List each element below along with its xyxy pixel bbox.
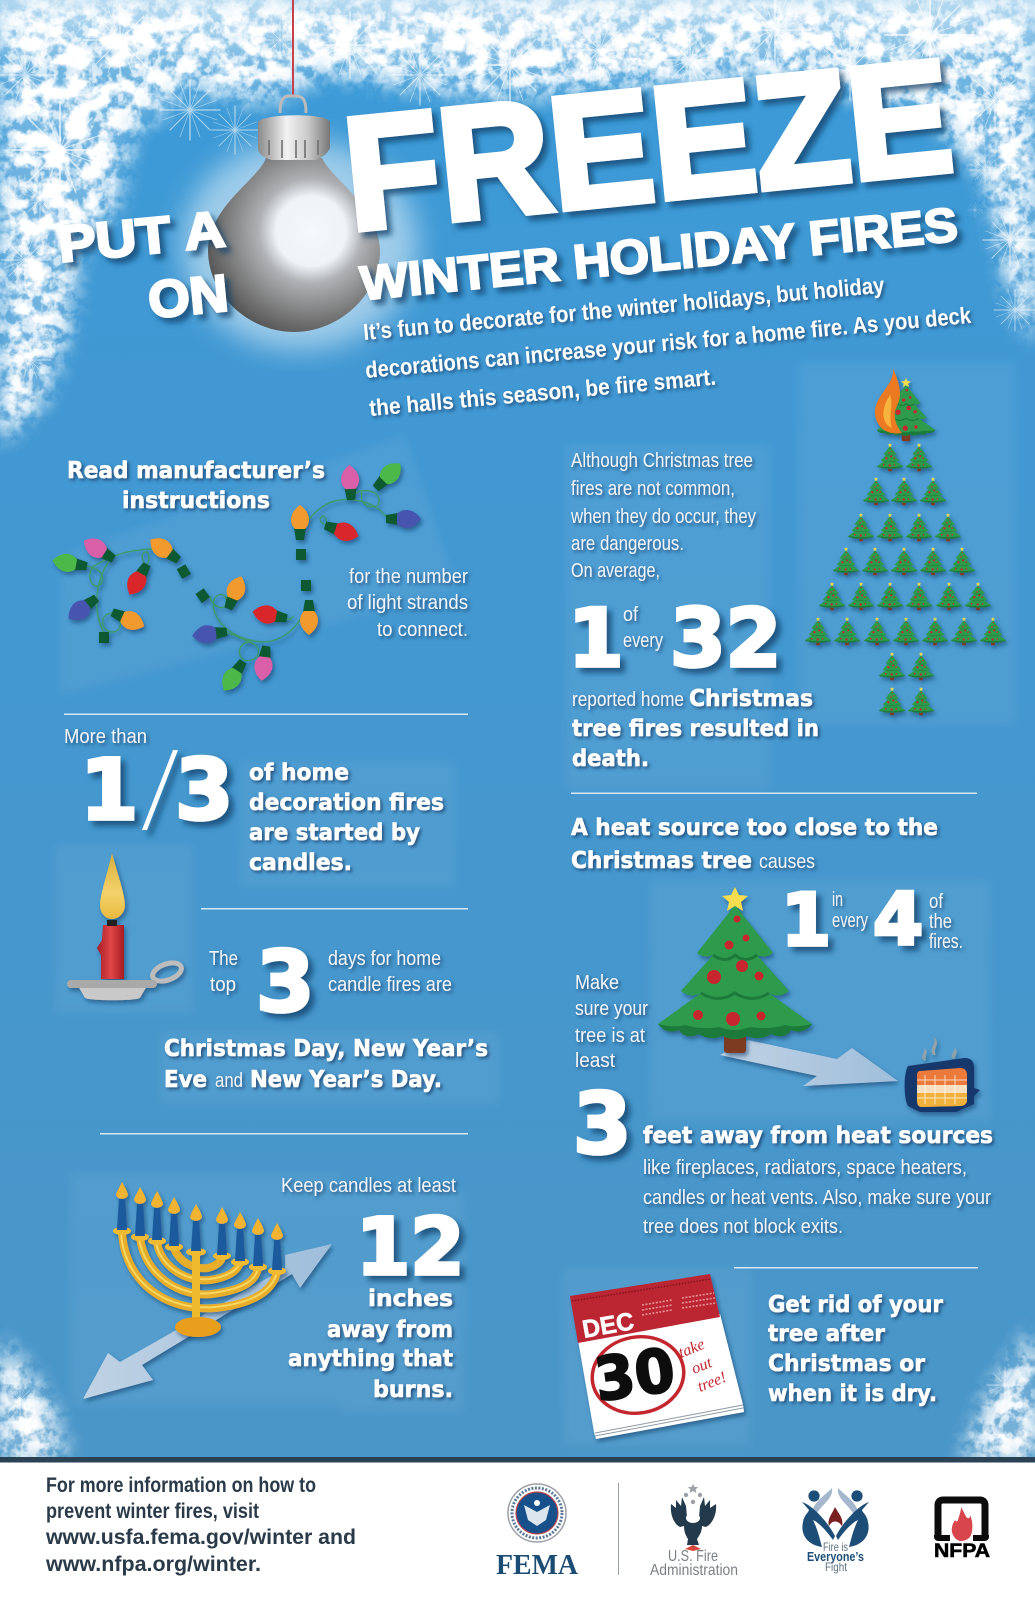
heading: read instructions: Read manufacturer’s	[67, 458, 325, 484]
text: although: On average,	[571, 560, 660, 582]
handwritten note: take	[676, 1336, 707, 1362]
panel: discard tree	[570, 1274, 944, 1439]
text: resulted in death: tree fires resulted in	[572, 716, 819, 742]
text: the top: The	[209, 948, 238, 970]
title: WINTER HOLIDAY FIRES: WINTER HOLIDAY FIRES	[358, 199, 960, 311]
icon: light strands	[51, 457, 421, 696]
text: make sure: tree is at	[575, 1025, 645, 1047]
text: decoration fires: of home	[249, 760, 349, 786]
calendar month: DEC	[580, 1307, 636, 1344]
text: the top: top	[210, 974, 236, 996]
title: FREEZE: FREEZE	[337, 25, 959, 264]
title: PUT A: PUT A	[56, 200, 227, 273]
text: more information: For more information on how to	[46, 1474, 316, 1497]
icon: menorah	[113, 1182, 286, 1337]
panel: tree fires	[568, 368, 1006, 772]
stat: 1/3: 1	[80, 741, 138, 839]
stat: 1 in every 4: of	[929, 891, 943, 913]
text: resulted in death: reported home	[572, 689, 684, 711]
text: although: when they do occur, they	[570, 506, 756, 528]
text: although: are dangerous.	[571, 533, 684, 555]
slogan: Fire is	[823, 1540, 848, 1554]
panel: heat source	[571, 815, 993, 1238]
heading: read instructions: instructions	[122, 488, 270, 514]
panel: top three days	[164, 933, 488, 1093]
text: feet away: candles or heat vents. Also, make sure your	[643, 1187, 991, 1209]
stat: 12 inches: 12	[356, 1203, 465, 1293]
text: light strands: for the number	[349, 566, 468, 588]
title: ON: ON	[146, 265, 231, 330]
text: decoration fires: candles.	[249, 850, 352, 876]
text: away from anything: anything that	[288, 1346, 453, 1372]
stat: 1 in every 4: fires.	[929, 931, 963, 953]
logo: Fire is Everyone's Fight: Fight	[825, 1560, 848, 1574]
lighter content panels	[55, 362, 1016, 1446]
text: days for home candle fires	[328, 948, 452, 996]
text: get rid of tree: tree after	[768, 1321, 886, 1347]
stat: 1 of every 32	[568, 592, 781, 685]
icon: large christmas tree	[658, 887, 812, 1053]
text: although	[570, 450, 756, 582]
text: more information: www.usfa.fema.gov/winter and	[45, 1526, 356, 1549]
text: keep candles: Keep candles at least	[281, 1175, 456, 1197]
text: get rid of tree	[768, 1292, 944, 1407]
text: feet away	[643, 1123, 993, 1238]
text: light strands: to connect.	[377, 619, 468, 641]
text: more information: www.nfpa.org/winter.	[45, 1553, 261, 1576]
heading: heat source	[571, 815, 938, 874]
calendar date: 30	[590, 1335, 679, 1416]
icon: space heater	[905, 1036, 980, 1112]
stat: 1 in every 4: the	[929, 911, 952, 933]
text: away from anything: inches	[368, 1286, 453, 1312]
stat: 1/3	[80, 741, 233, 839]
text: more than: More than	[64, 726, 147, 748]
text: holiday dates	[164, 1036, 488, 1093]
stat: 1 in every 4: in	[832, 889, 843, 911]
ornament	[182, 0, 418, 350]
text: more information: prevent winter fires, visit	[46, 1500, 259, 1523]
text: make sure: least	[575, 1050, 615, 1072]
logo: Fire is Everyone's Fight	[802, 1488, 869, 1574]
arrow: tree to heater	[720, 1040, 898, 1086]
text: resulted in death	[572, 686, 819, 772]
text: make sure: sure your	[575, 998, 648, 1020]
icon: burning tree	[875, 368, 935, 441]
stat: 3 days: 3	[256, 933, 314, 1031]
FEMA wordmark: FEMA	[496, 1549, 578, 1581]
text: more information	[45, 1474, 356, 1576]
handwritten note: tree!	[695, 1369, 729, 1396]
stat: 1 of every 32: of	[623, 604, 638, 626]
text: holiday dates: Eve	[164, 1067, 207, 1093]
footer	[0, 1457, 1035, 1600]
text: days for home candle fires: days for home	[328, 948, 441, 970]
intro text: It’s fun to decorate for the winter holidays, but holiday	[362, 272, 885, 345]
text: holiday dates: and	[215, 1070, 243, 1092]
text: light strands: of light strands	[347, 592, 468, 614]
text: light strands	[347, 566, 468, 641]
text: away from anything: burns.	[373, 1377, 453, 1403]
text: get rid of tree: Christmas or	[768, 1351, 926, 1377]
text: the top	[209, 948, 238, 996]
stat: 1 in every 4: every	[832, 910, 868, 932]
handwritten note	[676, 1336, 729, 1396]
text: make sure: Make	[575, 972, 619, 994]
stat: 1 in every 4: 1	[781, 878, 831, 962]
text: decoration fires	[249, 760, 444, 876]
text: resulted in death: Christmas	[689, 686, 813, 712]
ornament string	[292, 0, 294, 97]
text: although: Although Christmas tree	[571, 450, 753, 472]
logo: US Fire Administration: Administration	[650, 1562, 738, 1579]
icon: candle	[67, 853, 184, 1000]
intro text: the halls this season, be fire smart.	[368, 364, 717, 421]
text: away from anything	[288, 1286, 453, 1403]
stat: 1 in every 4	[781, 877, 963, 962]
stat: 1 of every 32: 1	[568, 592, 624, 685]
NFPA wordmark: NFPA	[934, 1541, 990, 1562]
heading: heat source: causes	[759, 851, 815, 873]
text: feet away: like fireplaces, radiators, space heaters,	[643, 1157, 967, 1179]
text: get rid of tree: Get rid of your	[768, 1292, 944, 1318]
text: make sure	[575, 972, 648, 1072]
text: decoration fires: decoration fires	[249, 790, 444, 816]
stat: 1 in every 4: 4	[873, 877, 923, 961]
text: decoration fires: are started by	[249, 820, 420, 846]
text: get rid of tree: when it is dry.	[768, 1381, 937, 1407]
stat: 1 of every 32: 32	[670, 592, 781, 685]
stat: 3 feet: 3	[573, 1075, 631, 1173]
text: holiday dates: New Year’s Day.	[250, 1067, 442, 1093]
text: although: fires are not common,	[571, 478, 735, 500]
title	[56, 25, 960, 330]
text: away from anything: away from	[327, 1317, 453, 1343]
logo: US Fire Administration	[650, 1484, 738, 1579]
arrow: two-way distance	[83, 1244, 332, 1399]
handwritten note: out	[689, 1354, 715, 1378]
text: feet away: feet away from heat sources	[643, 1123, 993, 1149]
heading: heat source: Christmas tree	[571, 848, 752, 874]
panel: one third stat	[64, 726, 444, 876]
text: feet away: tree does not block exits.	[643, 1216, 843, 1238]
chart: tree pictogram	[805, 368, 1006, 715]
logo: NFPA	[934, 1500, 990, 1562]
stat: 1/3: 3	[175, 741, 233, 839]
USFA wordmark: U.S. Fire	[668, 1548, 718, 1565]
panel: menorah	[83, 1175, 465, 1403]
logo: FEMA	[496, 1484, 578, 1581]
text: resulted in death: death.	[572, 746, 649, 772]
heading: heat source: A heat source too close to the	[571, 815, 938, 841]
heading: read instructions	[67, 458, 325, 514]
text: holiday dates: Christmas Day, New Year’s	[164, 1036, 488, 1062]
text: days for home candle fires: candle fires are	[328, 974, 452, 996]
logo: Fire is Everyone's Fight: Everyone’s	[807, 1549, 864, 1564]
intro text	[362, 272, 972, 421]
stat: 1 of every 32: every	[623, 630, 663, 652]
panel: holiday lights	[51, 457, 468, 696]
icon: calendar	[570, 1274, 744, 1439]
